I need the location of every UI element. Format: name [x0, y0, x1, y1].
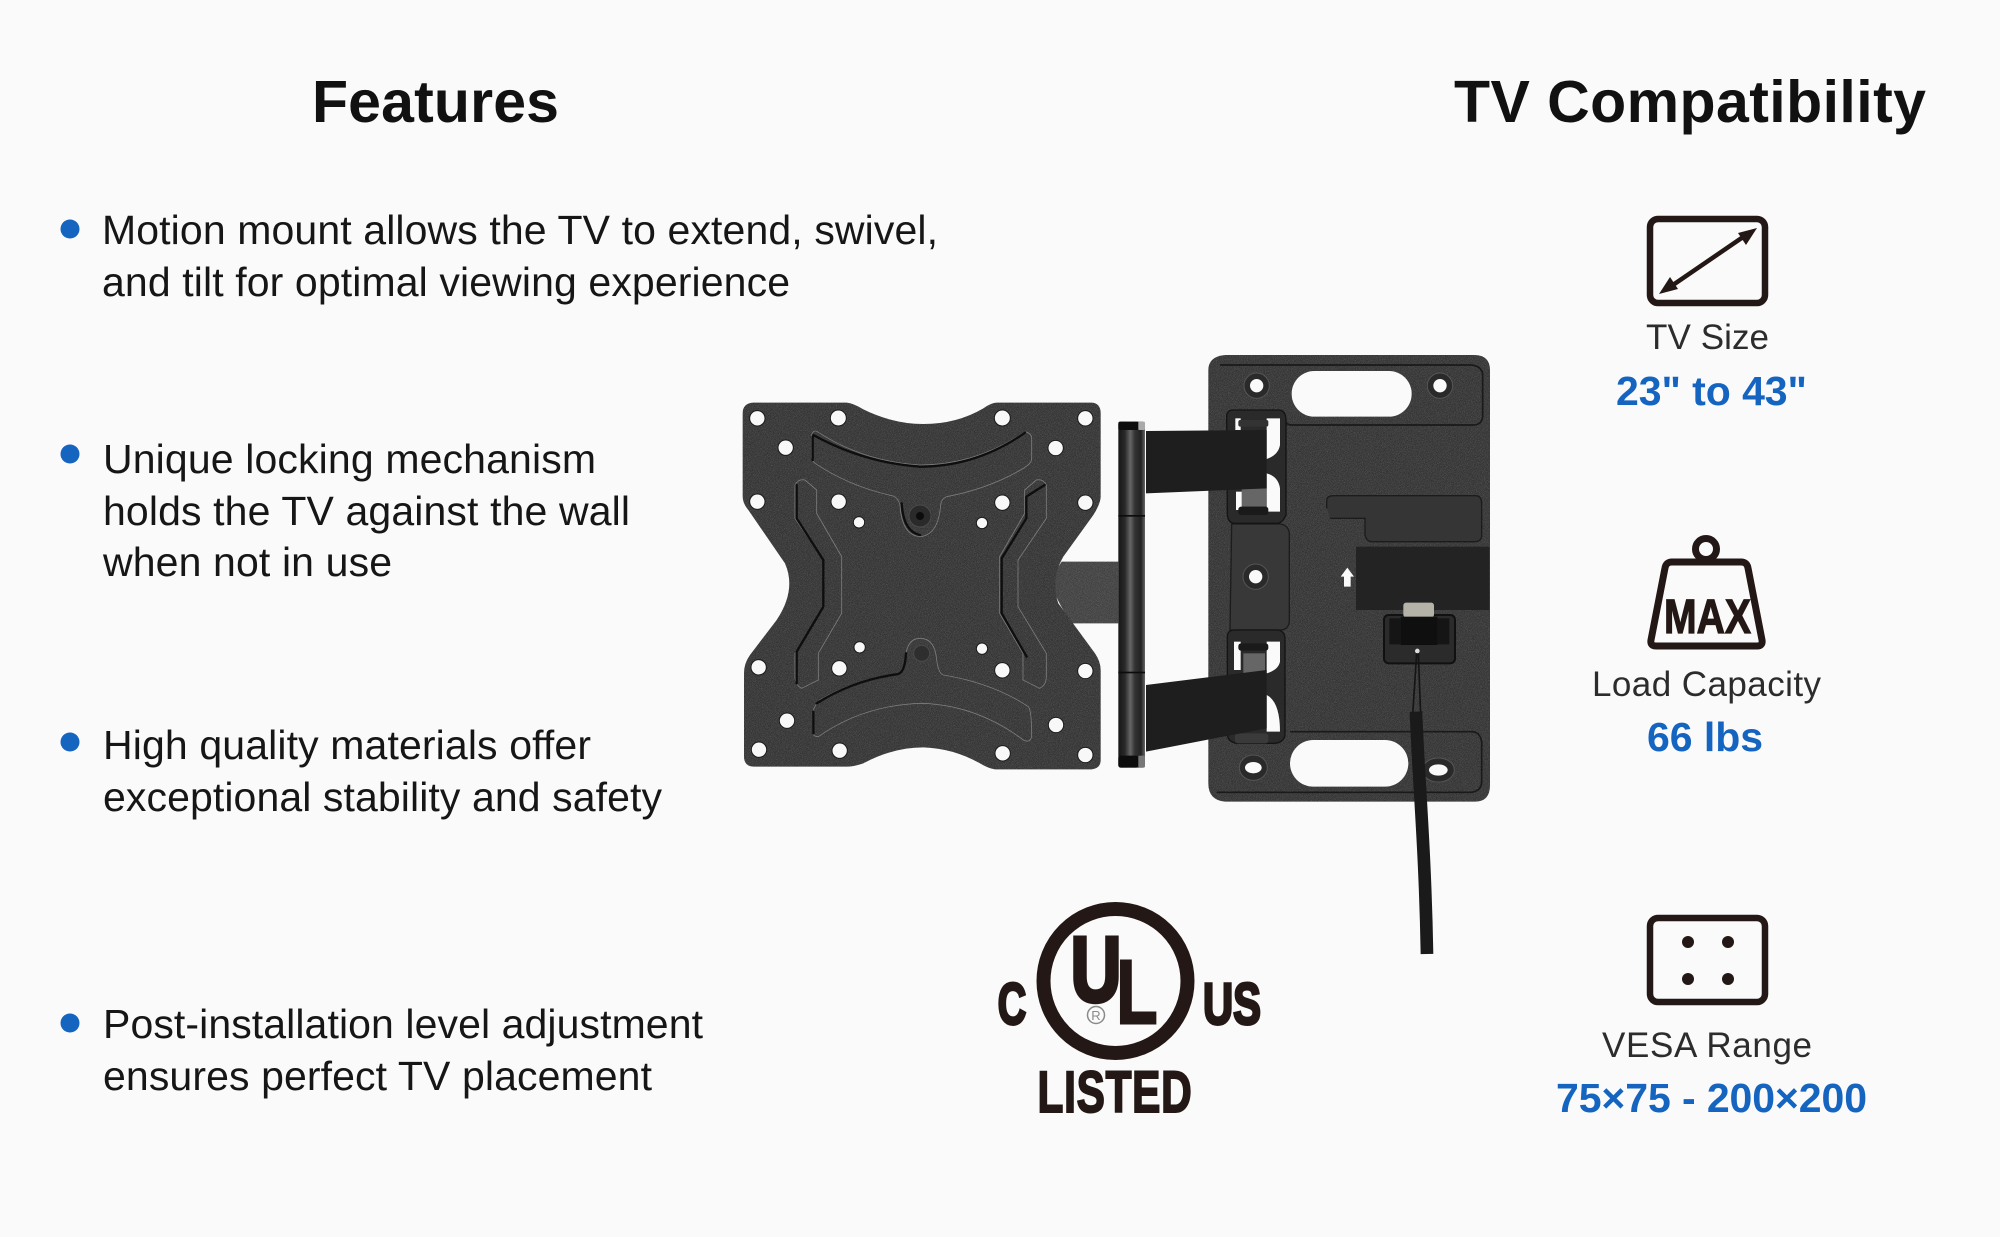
- registered mark: [1088, 1006, 1104, 1024]
- letter U: U: [1071, 919, 1121, 1021]
- release cable: [1416, 712, 1427, 954]
- spec: TV size: [1616, 219, 1807, 414]
- icon: screen diagonal: [1650, 219, 1765, 303]
- feature 4: Post-installation level adjustment: [103, 1001, 704, 1047]
- heading: TV Compatibility: TV Compatibility: [1454, 69, 1926, 135]
- spec: VESA range: [1556, 918, 1867, 1121]
- feature 4: ensures perfect TV placement: [103, 1053, 653, 1099]
- feature 2: [60, 436, 630, 585]
- registered mark: R: [1091, 1008, 1101, 1023]
- feature 3: exceptional stability and safety: [103, 774, 662, 820]
- feature 1: [60, 207, 938, 305]
- spec: TV size: TV Size: [1646, 318, 1769, 357]
- icon: max weight: [1651, 538, 1762, 646]
- icon: VESA holes: [1650, 918, 1765, 1002]
- spec: VESA range: 75×75 - 200×200: [1556, 1075, 1867, 1121]
- UL listed logo: [998, 909, 1261, 1125]
- feature 2: Unique locking mechanism: [103, 436, 596, 482]
- feature 2: holds the TV against the wall: [103, 488, 630, 534]
- panel: features list: [60, 207, 938, 1099]
- feature 3: [60, 722, 662, 820]
- feature 3: High quality materials offer: [103, 722, 591, 768]
- spec: load capacity: [1592, 538, 1822, 760]
- product illustration: TV wall mount: [743, 355, 1490, 954]
- feature 1: Motion mount allows the TV to extend, swivel,: [102, 207, 938, 253]
- letter c: C: [998, 971, 1026, 1037]
- heading: Features: Features: [312, 69, 559, 135]
- TV plate: [743, 403, 1118, 769]
- letter L: L: [1117, 941, 1157, 1042]
- wall plate and arms: [1118, 355, 1490, 802]
- spec: VESA range: VESA Range: [1602, 1026, 1812, 1065]
- icon: max weight: MAX: [1664, 591, 1751, 644]
- feature 1: and tilt for optimal viewing experience: [102, 259, 790, 305]
- spec: TV size: 23" to 43": [1616, 368, 1807, 414]
- feature 2: when not in use: [102, 539, 392, 585]
- feature 4: [60, 1001, 704, 1099]
- panel: TV compatibility: [1556, 219, 1867, 1121]
- spec: load capacity: 66 lbs: [1647, 714, 1763, 760]
- letters US: US: [1203, 971, 1261, 1037]
- word LISTED: LISTED: [1038, 1059, 1192, 1125]
- UL ring: [1044, 909, 1188, 1053]
- spec: load capacity: Load Capacity: [1592, 665, 1822, 704]
